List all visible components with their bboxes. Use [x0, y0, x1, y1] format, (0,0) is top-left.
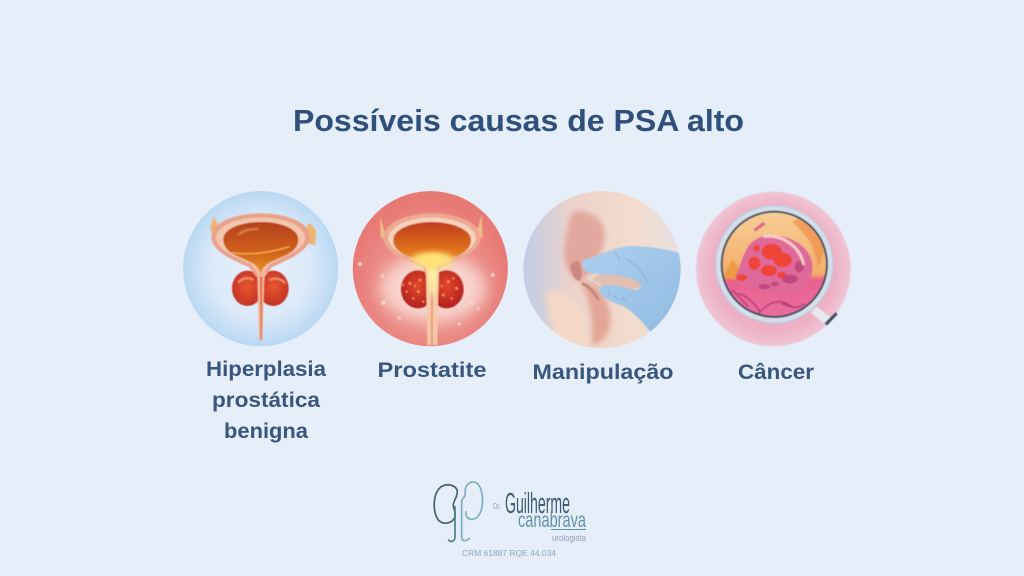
panel: manipulação	[523, 191, 682, 384]
icon: kidneys monogram	[434, 482, 483, 541]
logo: Dr. Guilherme Canabrava: urologista	[552, 533, 586, 543]
label: Hiperplasia	[206, 358, 326, 381]
icon: inflamed prostate illustration	[353, 191, 508, 346]
label: prostática	[212, 389, 320, 412]
title: Possíveis causas de PSA alto	[293, 104, 744, 138]
panel: prostatite	[353, 191, 508, 382]
panel: hiperplasia prostática benigna	[183, 191, 338, 443]
icon: enlarged prostate illustration	[183, 191, 338, 346]
label: Prostatite	[378, 359, 486, 382]
label: benigna	[224, 420, 308, 443]
registration: CRM 61887 RQE 44.034	[462, 548, 556, 558]
icon: magnifying glass over tumor cells	[696, 192, 851, 346]
logo: Dr. Guilherme Canabrava	[434, 482, 587, 558]
logo name second line: canabrava	[518, 509, 587, 532]
icon: gloved hand examining illustration	[523, 191, 682, 348]
label: Manipulação	[532, 361, 674, 384]
logo text: Dr.	[493, 502, 501, 511]
label: Câncer	[738, 361, 814, 384]
panel: câncer	[696, 192, 851, 384]
logo name first line: Guilherme	[505, 488, 570, 520]
